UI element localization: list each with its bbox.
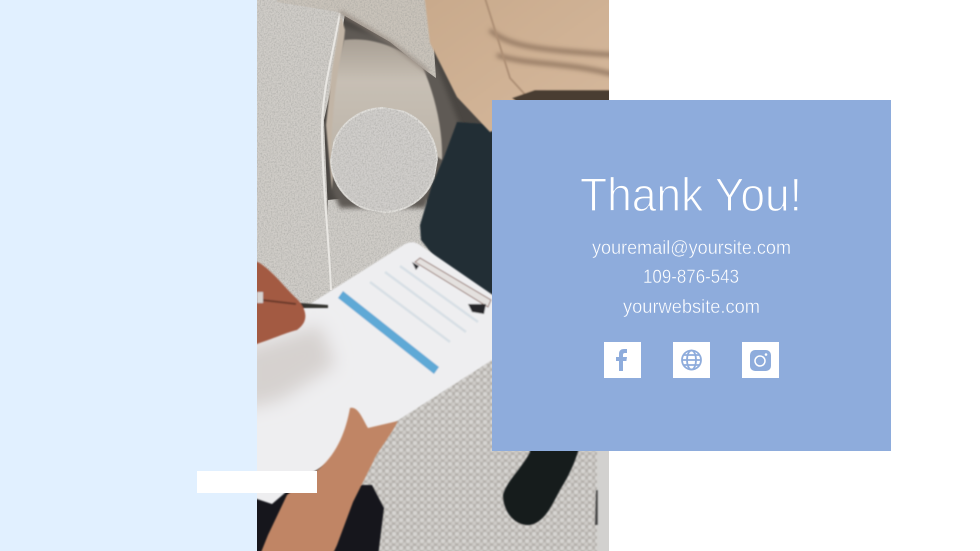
shadow behind bolster bbox=[332, 25, 462, 208]
left pale blue panel bbox=[0, 0, 257, 551]
dark jeans bbox=[419, 122, 492, 295]
sofa arm bbox=[257, 0, 346, 309]
icon: facebook bbox=[604, 342, 641, 378]
sofa edge at lower right bbox=[594, 451, 609, 551]
carpet bbox=[360, 359, 598, 551]
metal clip bbox=[415, 258, 491, 307]
contact panel bbox=[492, 100, 891, 451]
sock bbox=[502, 451, 580, 526]
email: youremail@yoursite.com bbox=[592, 238, 791, 259]
sofa seat bbox=[328, 198, 434, 292]
dark trousers bbox=[245, 485, 384, 551]
icon: globe bbox=[673, 342, 710, 378]
upper hand with pen bbox=[257, 261, 329, 345]
phone: 109-876-543 bbox=[643, 267, 739, 288]
lower hand bbox=[258, 408, 398, 551]
blanket bbox=[275, 0, 436, 78]
beige shirt bbox=[424, 0, 620, 132]
photo: therapist with clipboard and client on sofa bbox=[240, 0, 622, 551]
clipboard bbox=[240, 242, 500, 504]
bolster cushion bbox=[330, 38, 443, 213]
blue form bar bbox=[338, 291, 439, 374]
clipboard paper lines bbox=[370, 266, 478, 342]
icon: instagram bbox=[742, 342, 779, 378]
title: Thank You! bbox=[580, 168, 802, 221]
website: yourwebsite.com bbox=[623, 297, 760, 318]
white accent bar bbox=[197, 471, 317, 493]
